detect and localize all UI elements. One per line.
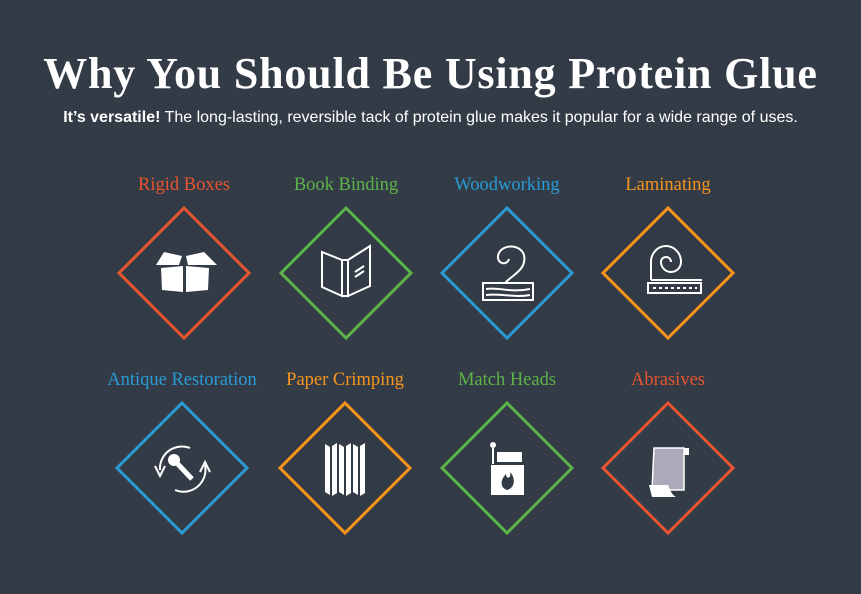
title: Why You Should Be Using Protein Glue — [43, 49, 818, 98]
item: Laminating — [603, 175, 733, 338]
item: Abrasives — [603, 370, 733, 533]
icon: wrench with arrows — [155, 446, 210, 492]
icon: crimped paper — [325, 443, 365, 496]
item: Rigid Boxes: Rigid Boxes — [138, 175, 230, 195]
icon: matchbox — [490, 442, 524, 495]
icon: roll — [648, 246, 702, 293]
item: Woodworking — [442, 175, 572, 338]
icon: box — [156, 252, 217, 292]
item: Paper Crimping — [280, 370, 410, 533]
item: Antique Restoration — [107, 370, 257, 533]
subtitle: It’s versatile! The long-lasting, reversible tack of protein glue makes it popular for a wide range of uses. — [63, 109, 798, 126]
item: Paper Crimping: Paper Crimping — [286, 370, 404, 390]
item: Woodworking: Woodworking — [454, 175, 560, 195]
item: Abrasives: Abrasives — [631, 370, 705, 390]
item: Antique Restoration: Antique Restoration — [107, 370, 257, 390]
item: Match Heads — [442, 370, 572, 533]
icon: book — [322, 246, 370, 296]
icon: sandpaper — [649, 448, 689, 497]
item: Laminating: Laminating — [625, 175, 711, 195]
item: Book Binding — [281, 175, 411, 338]
item: Rigid Boxes — [119, 175, 249, 338]
item: Match Heads: Match Heads — [458, 370, 556, 390]
item: Book Binding: Book Binding — [294, 175, 398, 195]
icon: wood shaving — [483, 246, 533, 300]
